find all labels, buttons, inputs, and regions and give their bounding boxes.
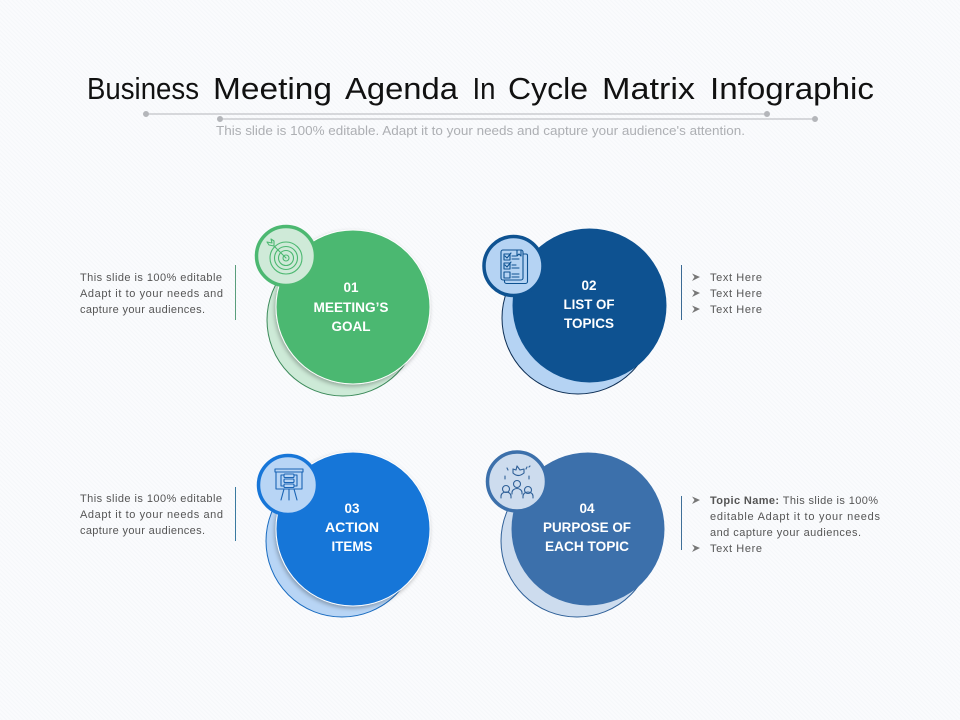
- label 02: TOPICS: [564, 316, 614, 331]
- text block: 01 description: capture your audiences.: [80, 304, 205, 316]
- panel: 03 action items: [258, 452, 430, 617]
- text block: 03 description: Adapt it to your needs and: [80, 509, 223, 521]
- main circle 04: [512, 452, 664, 606]
- text block: 02 bullets: Text Here: [710, 288, 762, 300]
- label 03: 03: [344, 501, 360, 516]
- title: [87, 72, 874, 106]
- main circle 03: [276, 452, 430, 606]
- title: Meeting: [213, 72, 332, 106]
- icon: presentation board badge: [258, 456, 318, 514]
- text block: 03 description: This slide is 100% editable: [80, 493, 222, 505]
- text block: 04 bullets: [682, 495, 880, 555]
- label 03: ITEMS: [332, 539, 372, 554]
- panel: 04 purpose of each topic: [488, 452, 664, 617]
- subtitle: This slide is 100% editable. Adapt it to your needs and capture your audience's attention.: [216, 123, 745, 138]
- text block: 01 description: Adapt it to your needs and: [80, 288, 223, 300]
- label 02: [564, 278, 614, 331]
- label 04: 04: [579, 501, 595, 516]
- text block: 02 bullets: Text Here: [710, 272, 762, 284]
- text block: 03 description: capture your audiences.: [80, 525, 205, 537]
- label 01: [314, 280, 388, 334]
- title: Business: [87, 72, 199, 106]
- label 04: [543, 501, 631, 554]
- text block: 03 description: [80, 487, 236, 541]
- back crescent 01: [267, 244, 419, 396]
- panel: 02 list of topics: [484, 228, 666, 394]
- text block: 01 description: This slide is 100% editable: [80, 272, 222, 284]
- label 03: [325, 501, 379, 554]
- main circle 02: [512, 228, 666, 382]
- text block: 02 bullets: Text Here: [710, 304, 762, 316]
- text block: 04 bullets: Text Here: [710, 543, 762, 555]
- title underline connectors: [144, 112, 818, 122]
- title: In: [472, 72, 496, 106]
- label 03: ACTION: [325, 520, 379, 535]
- label 01: GOAL: [332, 319, 370, 334]
- icon: team badge: [488, 452, 546, 511]
- panel: 01 meeting's goal: [256, 226, 430, 396]
- back crescent 04: [501, 465, 653, 617]
- main circle 01: [276, 230, 430, 384]
- title: Cycle: [508, 72, 588, 106]
- label 02: LIST OF: [564, 297, 614, 312]
- text block: 04 bullets: editable Adapt it to your needs: [710, 511, 880, 523]
- label 02: 02: [581, 278, 597, 293]
- label 01: MEETING’S: [314, 300, 388, 315]
- label 04: EACH TOPIC: [545, 539, 629, 554]
- label 01: 01: [343, 280, 359, 295]
- icon: checklist badge: [484, 236, 543, 296]
- label 04: PURPOSE OF: [543, 520, 631, 535]
- icon: target badge: [256, 226, 316, 286]
- text block: 01 description: [80, 265, 236, 320]
- text block: 04 bullets: Topic Name: This slide is 100%: [710, 495, 878, 507]
- text block: 02 bullets: [682, 265, 762, 320]
- back crescent 02: [502, 242, 654, 394]
- text block: 04 bullets: and capture your audiences.: [710, 527, 861, 539]
- title: Matrix: [602, 72, 695, 106]
- title: Agenda: [345, 72, 458, 106]
- title: Infographic: [710, 72, 874, 106]
- back crescent 03: [266, 465, 418, 617]
